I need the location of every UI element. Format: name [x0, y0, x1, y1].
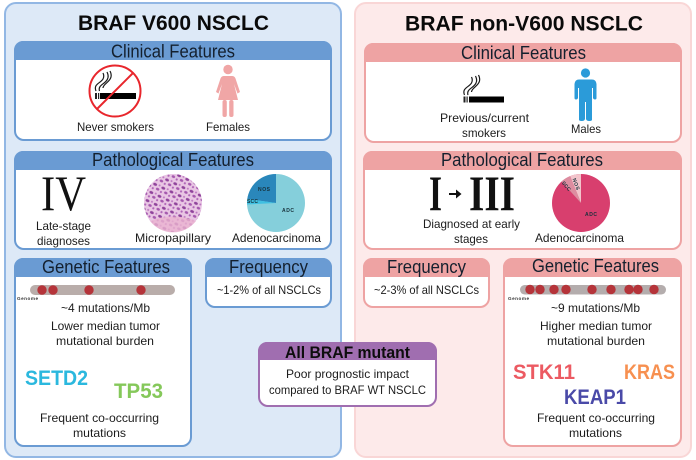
pie chart: V600 histology: SCC [247, 199, 258, 205]
text: frequency value: ~1-2% of all NSCLCs [217, 283, 321, 297]
text: frequency value: ~2-3% of all NSCLCs [374, 283, 479, 297]
heading: pathological features: Pathological Features [92, 150, 254, 170]
genome bar with mutations: Genome [508, 296, 529, 301]
icon: male [574, 68, 596, 121]
label: never smokers: Never smokers [77, 120, 154, 134]
text: co-occurring mutations: mutations [73, 426, 126, 440]
text: lower median TMB [51, 319, 160, 348]
text: lower median TMB: Lower median tumor [51, 319, 160, 333]
stage I numeral: I [429, 165, 442, 221]
label: diagnosed at early stages [423, 217, 520, 246]
text: co-occurring mutations: Frequent co-occurring [537, 411, 655, 425]
title: BRAF V600 NSCLC: BRAF V600 NSCLC [78, 11, 269, 35]
genome bar with mutations: Genome [17, 296, 38, 301]
heading: genetic features: Genetic Features [42, 257, 170, 277]
text: co-occurring mutations [537, 411, 655, 440]
heading: frequency: Frequency [387, 257, 466, 277]
label: males: Males [571, 122, 601, 136]
text: higher median TMB [540, 319, 652, 348]
heading: all BRAF mutant: All BRAF mutant [285, 343, 410, 362]
pie chart: non-V600 histology: NOS [571, 178, 581, 192]
text: co-occurring mutations: Frequent co-occurring [40, 411, 159, 425]
panel: pathological features non-V600 [363, 150, 682, 249]
text: mutation rate: ~4 mutations/Mb [61, 301, 150, 315]
text: co-occurring mutations: mutations [569, 426, 622, 440]
genome bar with mutations [508, 285, 666, 301]
callout: all BRAF mutant [258, 342, 437, 406]
gene: TP53: TP53 [114, 380, 163, 403]
text: prognostic impact [269, 367, 426, 397]
text: mutation rate: ~9 mutations/Mb [551, 301, 640, 315]
heading: genetic features: Genetic Features [532, 256, 659, 276]
label: previous/current smokers: Previous/current [440, 111, 530, 125]
heading: clinical features: Clinical Features [111, 42, 235, 62]
image: micropapillary histology [144, 174, 202, 232]
panel: frequency non-V600 [363, 257, 490, 307]
label: adenocarcinoma: Adenocarcinoma [535, 231, 624, 245]
gene: SETD2: SETD2 [25, 367, 88, 390]
gene: KEAP1: KEAP1 [564, 386, 626, 409]
label: females: Females [206, 120, 250, 134]
label: diagnosed at early stages: stages [454, 232, 488, 246]
label: previous/current smokers: smokers [462, 126, 506, 140]
panel: clinical features V600 [14, 41, 332, 140]
panel: genetic features non-V600 [503, 256, 682, 446]
text: co-occurring mutations [40, 411, 159, 440]
panel: BRAF non-V600 NSCLC [355, 3, 691, 457]
heading: pathological features: Pathological Features [441, 150, 603, 170]
panel: genetic features V600 [14, 257, 192, 446]
panel: frequency V600 [205, 257, 332, 307]
title: BRAF non-V600 NSCLC: BRAF non-V600 NSCLC [405, 12, 643, 36]
text: prognostic impact: Poor prognostic impact [286, 367, 410, 381]
genome bar with mutations [17, 285, 175, 301]
label: diagnosed at early stages: Diagnosed at early [423, 217, 520, 231]
label: micropapillary: Micropapillary [135, 231, 211, 245]
pie chart: V600 histology: ADC [282, 208, 294, 214]
pie chart: V600 histology: NOS [258, 187, 271, 193]
panel: clinical features non-V600 [364, 43, 682, 142]
pie chart: non-V600 histology [552, 174, 610, 232]
icon: cigarette [464, 75, 504, 102]
text: higher median TMB: Higher median tumor [540, 319, 652, 333]
label: adenocarcinoma: Adenocarcinoma [232, 231, 321, 245]
label: late-stage diagnoses: diagnoses [37, 234, 90, 248]
label: previous/current smokers [440, 111, 530, 140]
pie chart: V600 histology [247, 174, 305, 232]
stage IV numeral: IV [41, 165, 86, 221]
text: higher median TMB: mutational burden [547, 334, 645, 348]
text: prognostic impact: compared to BRAF WT NSCLC [269, 383, 426, 397]
label: late-stage diagnoses: Late-stage [36, 219, 91, 233]
pie chart: non-V600 histology: ADC [585, 212, 597, 218]
label: late-stage diagnoses [36, 219, 91, 248]
icon: female [216, 65, 240, 117]
icon: no smoking [90, 66, 140, 116]
gene: KRAS: KRAS [624, 361, 675, 384]
pie chart: non-V600 histology: SCC [560, 180, 572, 193]
panel: pathological features V600 [14, 150, 332, 249]
heading: clinical features: Clinical Features [461, 43, 586, 63]
gene: STK11: STK11 [513, 361, 575, 384]
heading: frequency: Frequency [229, 257, 308, 277]
panel: BRAF V600 NSCLC [5, 3, 341, 457]
stage III numeral: III [469, 165, 515, 221]
arrow: stage I to III [449, 190, 462, 198]
text: lower median TMB: mutational burden [56, 334, 154, 348]
